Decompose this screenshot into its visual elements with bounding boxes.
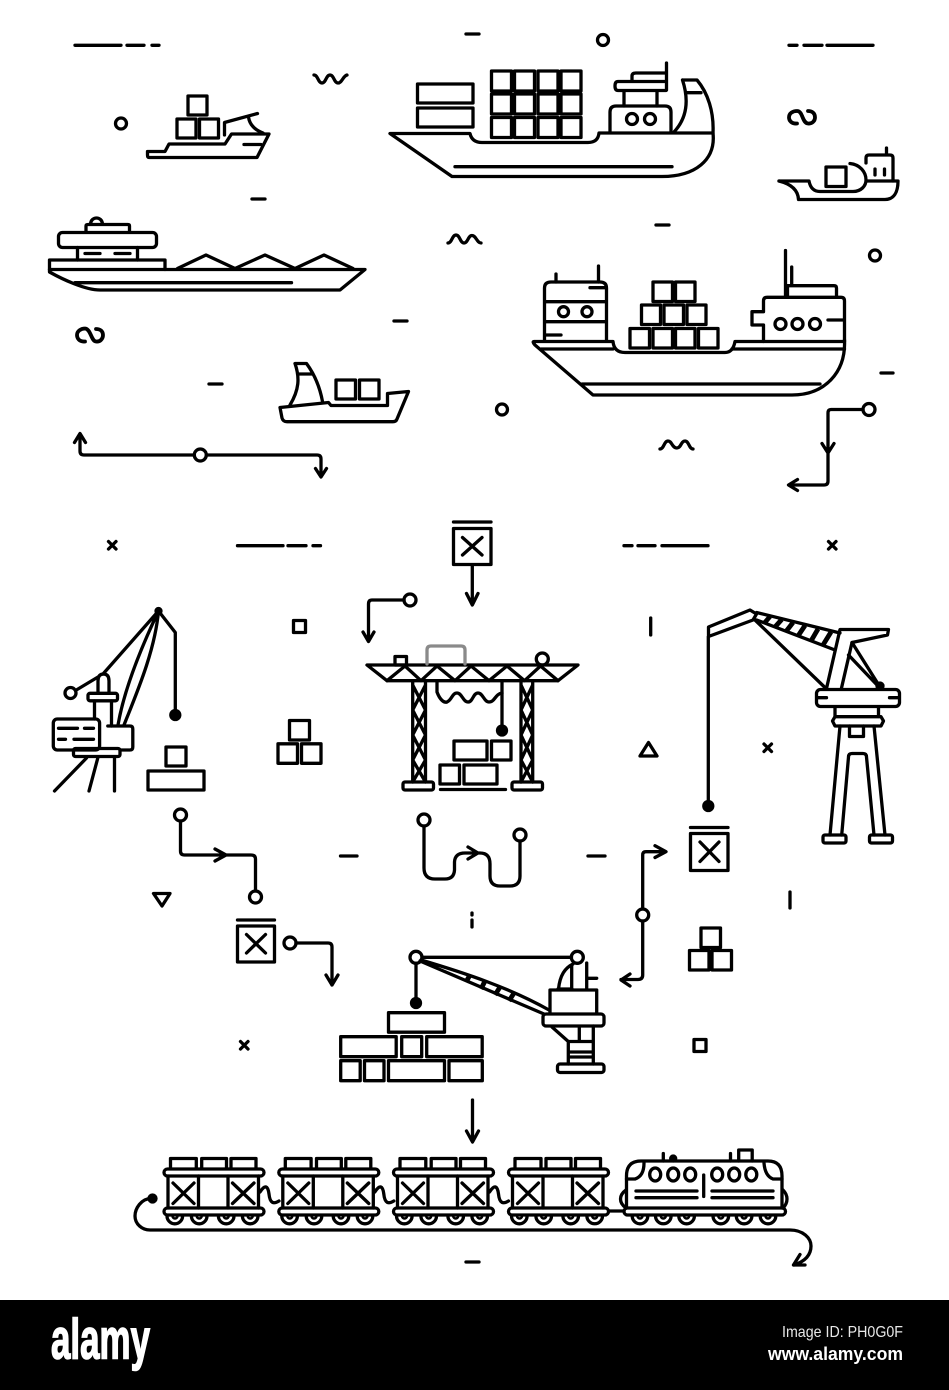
footer image id: Image ID: PH0G0F: [782, 1324, 903, 1341]
icon: train wagon 2: [279, 1158, 394, 1224]
icon: locomotive: [609, 1150, 787, 1224]
arrow: long train loop: [135, 1195, 811, 1265]
arrow: right routing path: [788, 404, 875, 490]
icon: small tug boat right: [779, 148, 898, 200]
icon: large container ship top: [390, 63, 713, 176]
icon: gantry crane: [367, 646, 578, 790]
decoration: top dashes and marks: [75, 34, 893, 449]
icon: large right crane: [704, 610, 900, 843]
icon: crate left: [238, 920, 274, 962]
icon: bulk barge left: [50, 218, 365, 290]
icon: small cargo boat top left: [148, 96, 269, 158]
footer bar: [0, 1300, 949, 1390]
decoration: middle marks: [108, 542, 836, 1262]
icon: train wagon 3: [394, 1158, 508, 1224]
icon: left port crane: [53, 608, 204, 791]
footer logo: alamy: [51, 1308, 150, 1372]
arrow: right two-way path: [621, 846, 666, 986]
icon: crate right: [690, 828, 728, 870]
arrow: into gantry crane: [363, 594, 416, 642]
footer url: www.alamy.com: [767, 1344, 903, 1364]
arrow: left crane to crate: [174, 809, 262, 903]
icon: small boat with sail: [280, 364, 408, 422]
arrow: crate to dock crane: [284, 937, 338, 985]
icon: crate with down arrow: [454, 522, 491, 605]
arrow: left routing path: [74, 434, 326, 477]
icon: large cargo ship right: [533, 250, 845, 395]
icon: train wagon 1: [164, 1158, 279, 1224]
icon: dock crane with bricks: [341, 951, 604, 1081]
arrow: bricks to train: [466, 1100, 478, 1142]
icon: train wagon 4: [508, 1158, 608, 1224]
arrow: middle squiggle: [418, 814, 526, 886]
